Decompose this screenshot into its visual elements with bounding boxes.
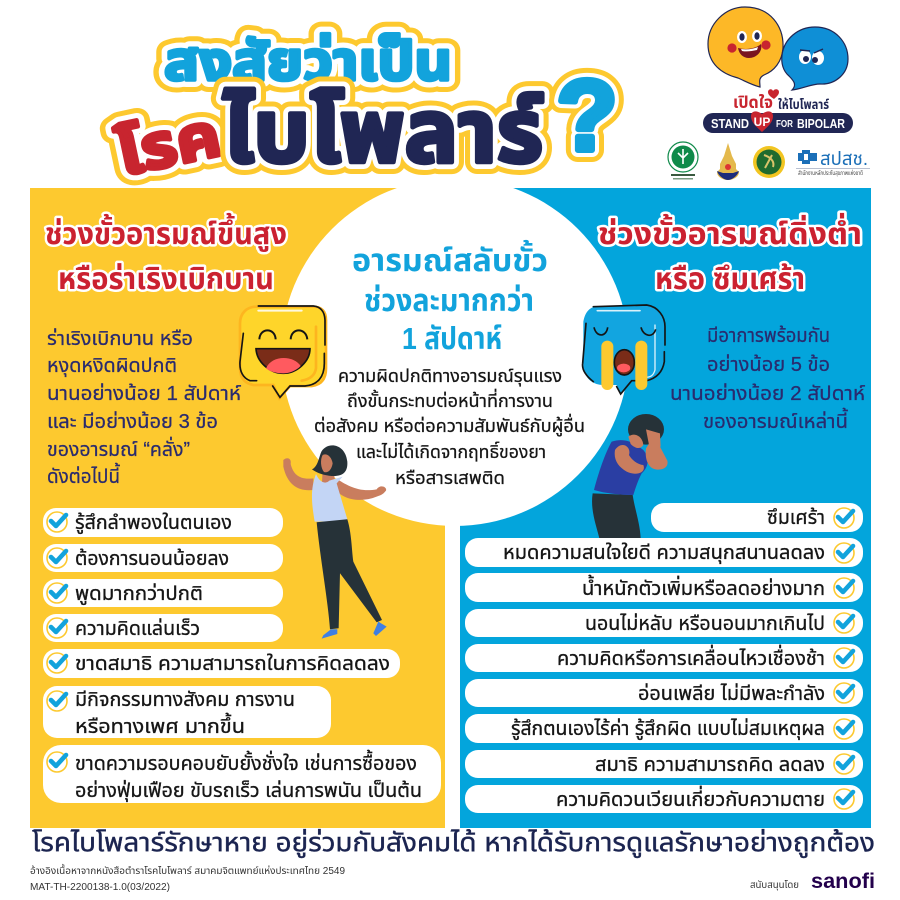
for text: FOR	[776, 119, 794, 130]
document code: MAT-TH-2200138-1.0(03/2022)	[30, 882, 170, 893]
logo: ministry of health	[668, 142, 698, 180]
heading: manic	[45, 212, 287, 296]
body line 2: ถึงขั้นกระทบต่อหน้าที่การงาน	[347, 388, 553, 411]
bipolar text: BIPOLAR	[797, 116, 846, 131]
nhso subtitle: สำนักงานหลักประกันสุขภาพแห่งชาติ	[798, 170, 863, 177]
row 4: ความคิดแล่นเร็ว	[75, 617, 200, 640]
manic para 5: ของอารมณ์ “คลั่ง”	[47, 436, 190, 461]
row 6: มีกิจกรรมทางสังคม การงาน	[75, 689, 295, 711]
row 4	[465, 609, 863, 637]
checklist: manic symptoms	[43, 508, 441, 803]
manic para 4: และ มีอย่างน้อย 3 ข้อ	[47, 410, 218, 433]
row 7: ขาดความรอบคอบยับยั้งชั่งใจ เช่นการซื้อของ	[75, 749, 417, 775]
depressive para 4: ของอารมณ์เหล่านี้	[703, 407, 848, 433]
emoji: crying	[583, 305, 665, 394]
row 4: นอนไม่หลับ หรือนอนมากเกินไป	[585, 612, 825, 635]
row 5: ความคิดหรือการเคลื่อนไหวเชื่องช้า	[557, 644, 825, 670]
row 2: หมดความสนใจใยดี ความสนุกสนานลดลง	[503, 542, 825, 564]
depressive para 2: อย่างน้อย 5 ข้อ	[707, 353, 830, 376]
row 9: ความคิดวนเวียนเกี่ยวกับความตาย	[556, 785, 825, 811]
manic para 3: นานอย่างน้อย 1 สัปดาห์	[47, 382, 241, 405]
title question mark: ?	[556, 60, 618, 172]
depressive para 3: นานอย่างน้อย 2 สัปดาห์	[670, 382, 865, 405]
stand up text: STAND	[711, 116, 749, 131]
row 1	[43, 508, 283, 537]
row 8	[465, 750, 863, 778]
text: depressive criteria	[670, 324, 865, 433]
title	[111, 32, 618, 190]
row 7: รู้สึกตนเองไร้ค่า รู้สึกผิด แบบไม่สมเหตุผล	[511, 717, 825, 741]
row 5: ขาดสมาธิ ความสามารถในการคิดลดลง	[75, 653, 390, 675]
icon: yellow speech bubble	[708, 7, 783, 87]
row 2: ต้องการนอนน้อยลง	[75, 547, 229, 570]
body line 3: ต่อสังคม หรือต่อความสัมพันธ์กับผู้อื่น	[314, 413, 585, 438]
row 7	[43, 745, 441, 803]
title word: rok: โรค	[111, 100, 227, 190]
icon: blue speech bubble	[782, 27, 848, 90]
row 1: ซึมเศร้า	[767, 506, 825, 529]
logo: stand up for bipolar	[703, 7, 853, 133]
title word: bipolar: ไบโพลาร์	[223, 82, 543, 181]
row 2	[43, 544, 283, 572]
logo: mental health dept	[753, 146, 785, 178]
row 6: หรือทางเพศ มากขึ้น	[75, 712, 245, 738]
row 3	[43, 579, 283, 607]
sponsor label: สนับสนุนโดย	[750, 879, 799, 891]
centre body text	[314, 366, 585, 488]
tagline 2: ให้ไบโพลาร์	[778, 97, 829, 112]
row 3: น้ำหนักตัวเพิ่มหรือลดอย่างมาก	[582, 574, 825, 600]
logo: royal crest	[717, 143, 739, 180]
emoji: happy	[240, 306, 326, 398]
panel: manic (yellow)	[30, 188, 445, 828]
title word: rok: โรค	[111, 100, 227, 190]
sponsor name: sanofi	[811, 870, 875, 893]
title line 1: สงสัยว่าเป็น	[164, 32, 452, 92]
row 6: อ่อนเพลีย ไม่มีพละกำลัง	[638, 682, 825, 705]
up text: UP	[754, 115, 770, 129]
row 9	[465, 785, 863, 813]
title line 1: สงสัยว่าเป็น	[164, 32, 452, 92]
row 1	[651, 503, 863, 532]
manic line 1: ช่วงขั้วอารมณ์ขึ้นสูง	[45, 212, 287, 252]
logo: nhso	[796, 149, 870, 177]
nhso name: สปสช.	[820, 149, 868, 170]
heading: depressive	[598, 212, 862, 296]
title question mark: ?	[556, 60, 618, 172]
illustration: sad woman	[592, 414, 668, 538]
depressive para 1: มีอาการพร้อมกัน	[707, 324, 830, 347]
manic para 2: หงุดหงิดผิดปกติ	[47, 355, 177, 377]
icon: heart	[768, 89, 779, 99]
row 2	[465, 538, 863, 567]
tagline: เปิดใจ	[733, 93, 773, 112]
illustration: dancing woman	[283, 445, 387, 639]
partner logos	[668, 142, 870, 180]
body line 1: ความผิดปกติทางอารมณ์รุนแรง	[338, 366, 562, 387]
title word: bipolar: ไบโพลาร์	[223, 82, 543, 181]
row 7	[465, 714, 863, 743]
title question mark: ?	[556, 60, 618, 172]
row 5	[465, 644, 863, 672]
text: manic criteria	[47, 327, 241, 488]
stand up pill	[703, 113, 853, 133]
centre line 1: อารมณ์สลับขั้ว	[352, 239, 548, 278]
row 1: รู้สึกลำพองในตนเอง	[75, 511, 232, 535]
reference note: อ้างอิงเนื้อหาจากหนังสือตำราโรคไบโพลาร์ สมาคมจิตแพทย์แห่งประเทศไทย 2549	[30, 863, 345, 877]
depressive line 2: หรือ ซึมเศร้า	[655, 263, 805, 296]
row 7: อย่างฟุ่มเฟือย ขับรถเร็ว เล่นการพนัน เป็นต้น	[75, 779, 422, 802]
title line 1: สงสัยว่าเป็น	[164, 32, 452, 92]
row 4	[43, 614, 283, 642]
centre line 2: ช่วงละมากกว่า	[364, 283, 534, 318]
row 3	[465, 573, 863, 602]
central white circle	[281, 178, 629, 526]
row 3: พูดมากกว่าปกติ	[75, 582, 203, 606]
footer statement: โรคไบโพลาร์รักษาหาย อยู่ร่วมกับสังคมได้ หากได้รับการดูแลรักษาอย่างถูกต้อง	[32, 827, 875, 858]
manic para 6: ดังต่อไปนี้	[47, 462, 120, 488]
panel: depressive (blue)	[460, 188, 871, 828]
body line 5: หรือสารเสพติด	[395, 468, 505, 488]
depressive line 1: ช่วงขั้วอารมณ์ดิ่งต่ำ	[598, 212, 862, 251]
centre line 3: 1 สัปดาห์	[402, 321, 502, 356]
manic para 1: ร่าเริงเบิกบาน หรือ	[47, 327, 193, 350]
heart: UP	[751, 111, 773, 132]
row 6	[465, 679, 863, 707]
row 5	[43, 649, 400, 678]
checklist: depressive symptoms	[465, 503, 863, 813]
manic line 2: หรือร่าเริงเบิกบาน	[58, 263, 274, 296]
row 8: สมาธิ ความสามารถคิด ลดลง	[595, 754, 825, 776]
centre heading	[352, 239, 548, 356]
body line 4: และไม่ได้เกิดจากฤทธิ์ของยา	[356, 441, 546, 462]
title word: rok: โรค	[111, 100, 227, 190]
row 6	[43, 686, 331, 738]
title word: bipolar: ไบโพลาร์	[223, 82, 543, 181]
